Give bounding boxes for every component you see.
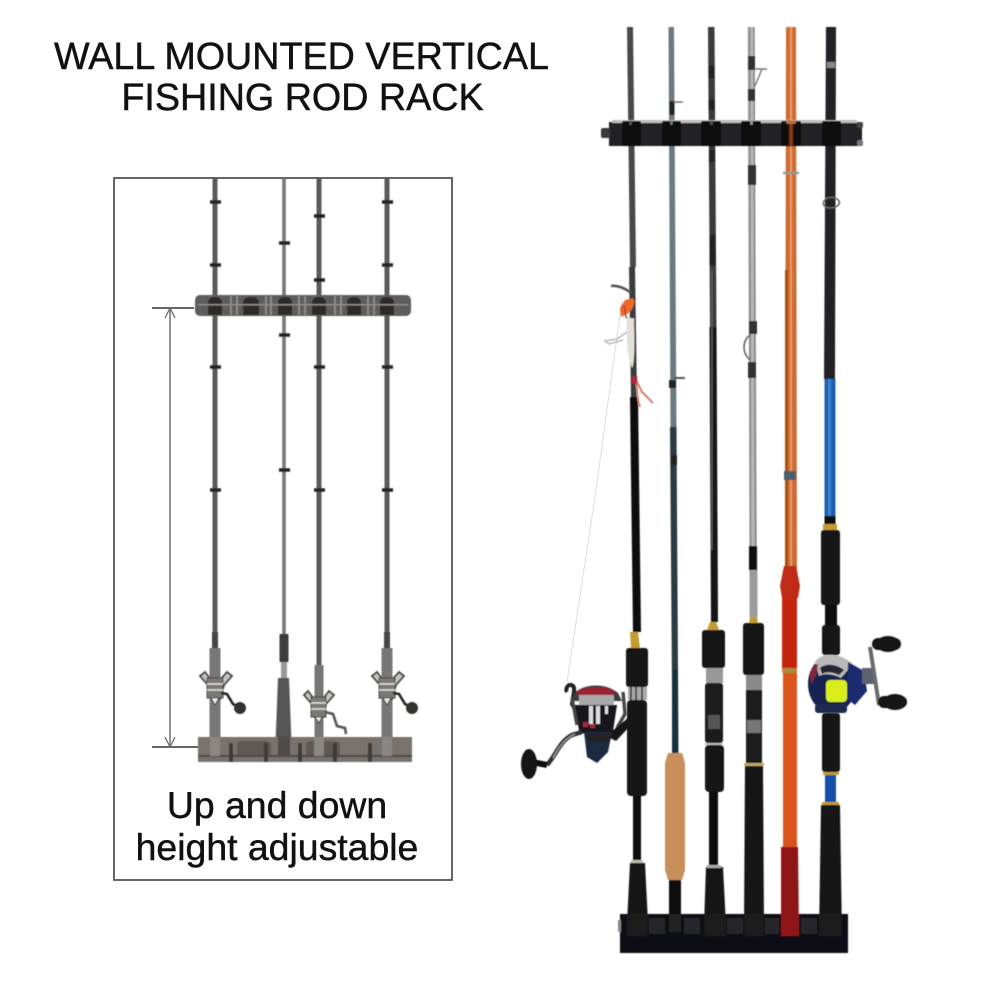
- caption: Up and down: [167, 784, 387, 826]
- title: WALL MOUNTED VERTICAL: [54, 35, 549, 77]
- rod butts: [210, 648, 220, 756]
- height arrow: [152, 308, 198, 747]
- bottom rack: [618, 914, 848, 953]
- rod 4: [743, 27, 767, 926]
- fishing line: [567, 300, 622, 682]
- panel frame: [114, 178, 452, 880]
- rod 3: [702, 27, 726, 925]
- title: [54, 35, 549, 118]
- diagram reels: [200, 672, 418, 734]
- diagram rods: [210, 178, 393, 756]
- title: FISHING ROD RACK: [121, 76, 484, 118]
- rod 1: [626, 27, 648, 923]
- top rack: [601, 120, 863, 146]
- rod 2: [665, 27, 685, 925]
- panel: height adjustment diagram: [114, 178, 452, 880]
- product photo: rods on rack: [521, 27, 907, 953]
- rod 6: [819, 27, 842, 937]
- top rack diagram: [195, 295, 411, 316]
- rods through rack slots: [629, 121, 796, 146]
- caption: height adjustable: [136, 826, 418, 868]
- bottom rack diagram: [198, 737, 412, 762]
- lure: [605, 286, 653, 407]
- spinning reel: [521, 685, 633, 779]
- baitcasting reel: [808, 636, 907, 713]
- caption: [136, 784, 418, 868]
- rod 5: [780, 27, 800, 935]
